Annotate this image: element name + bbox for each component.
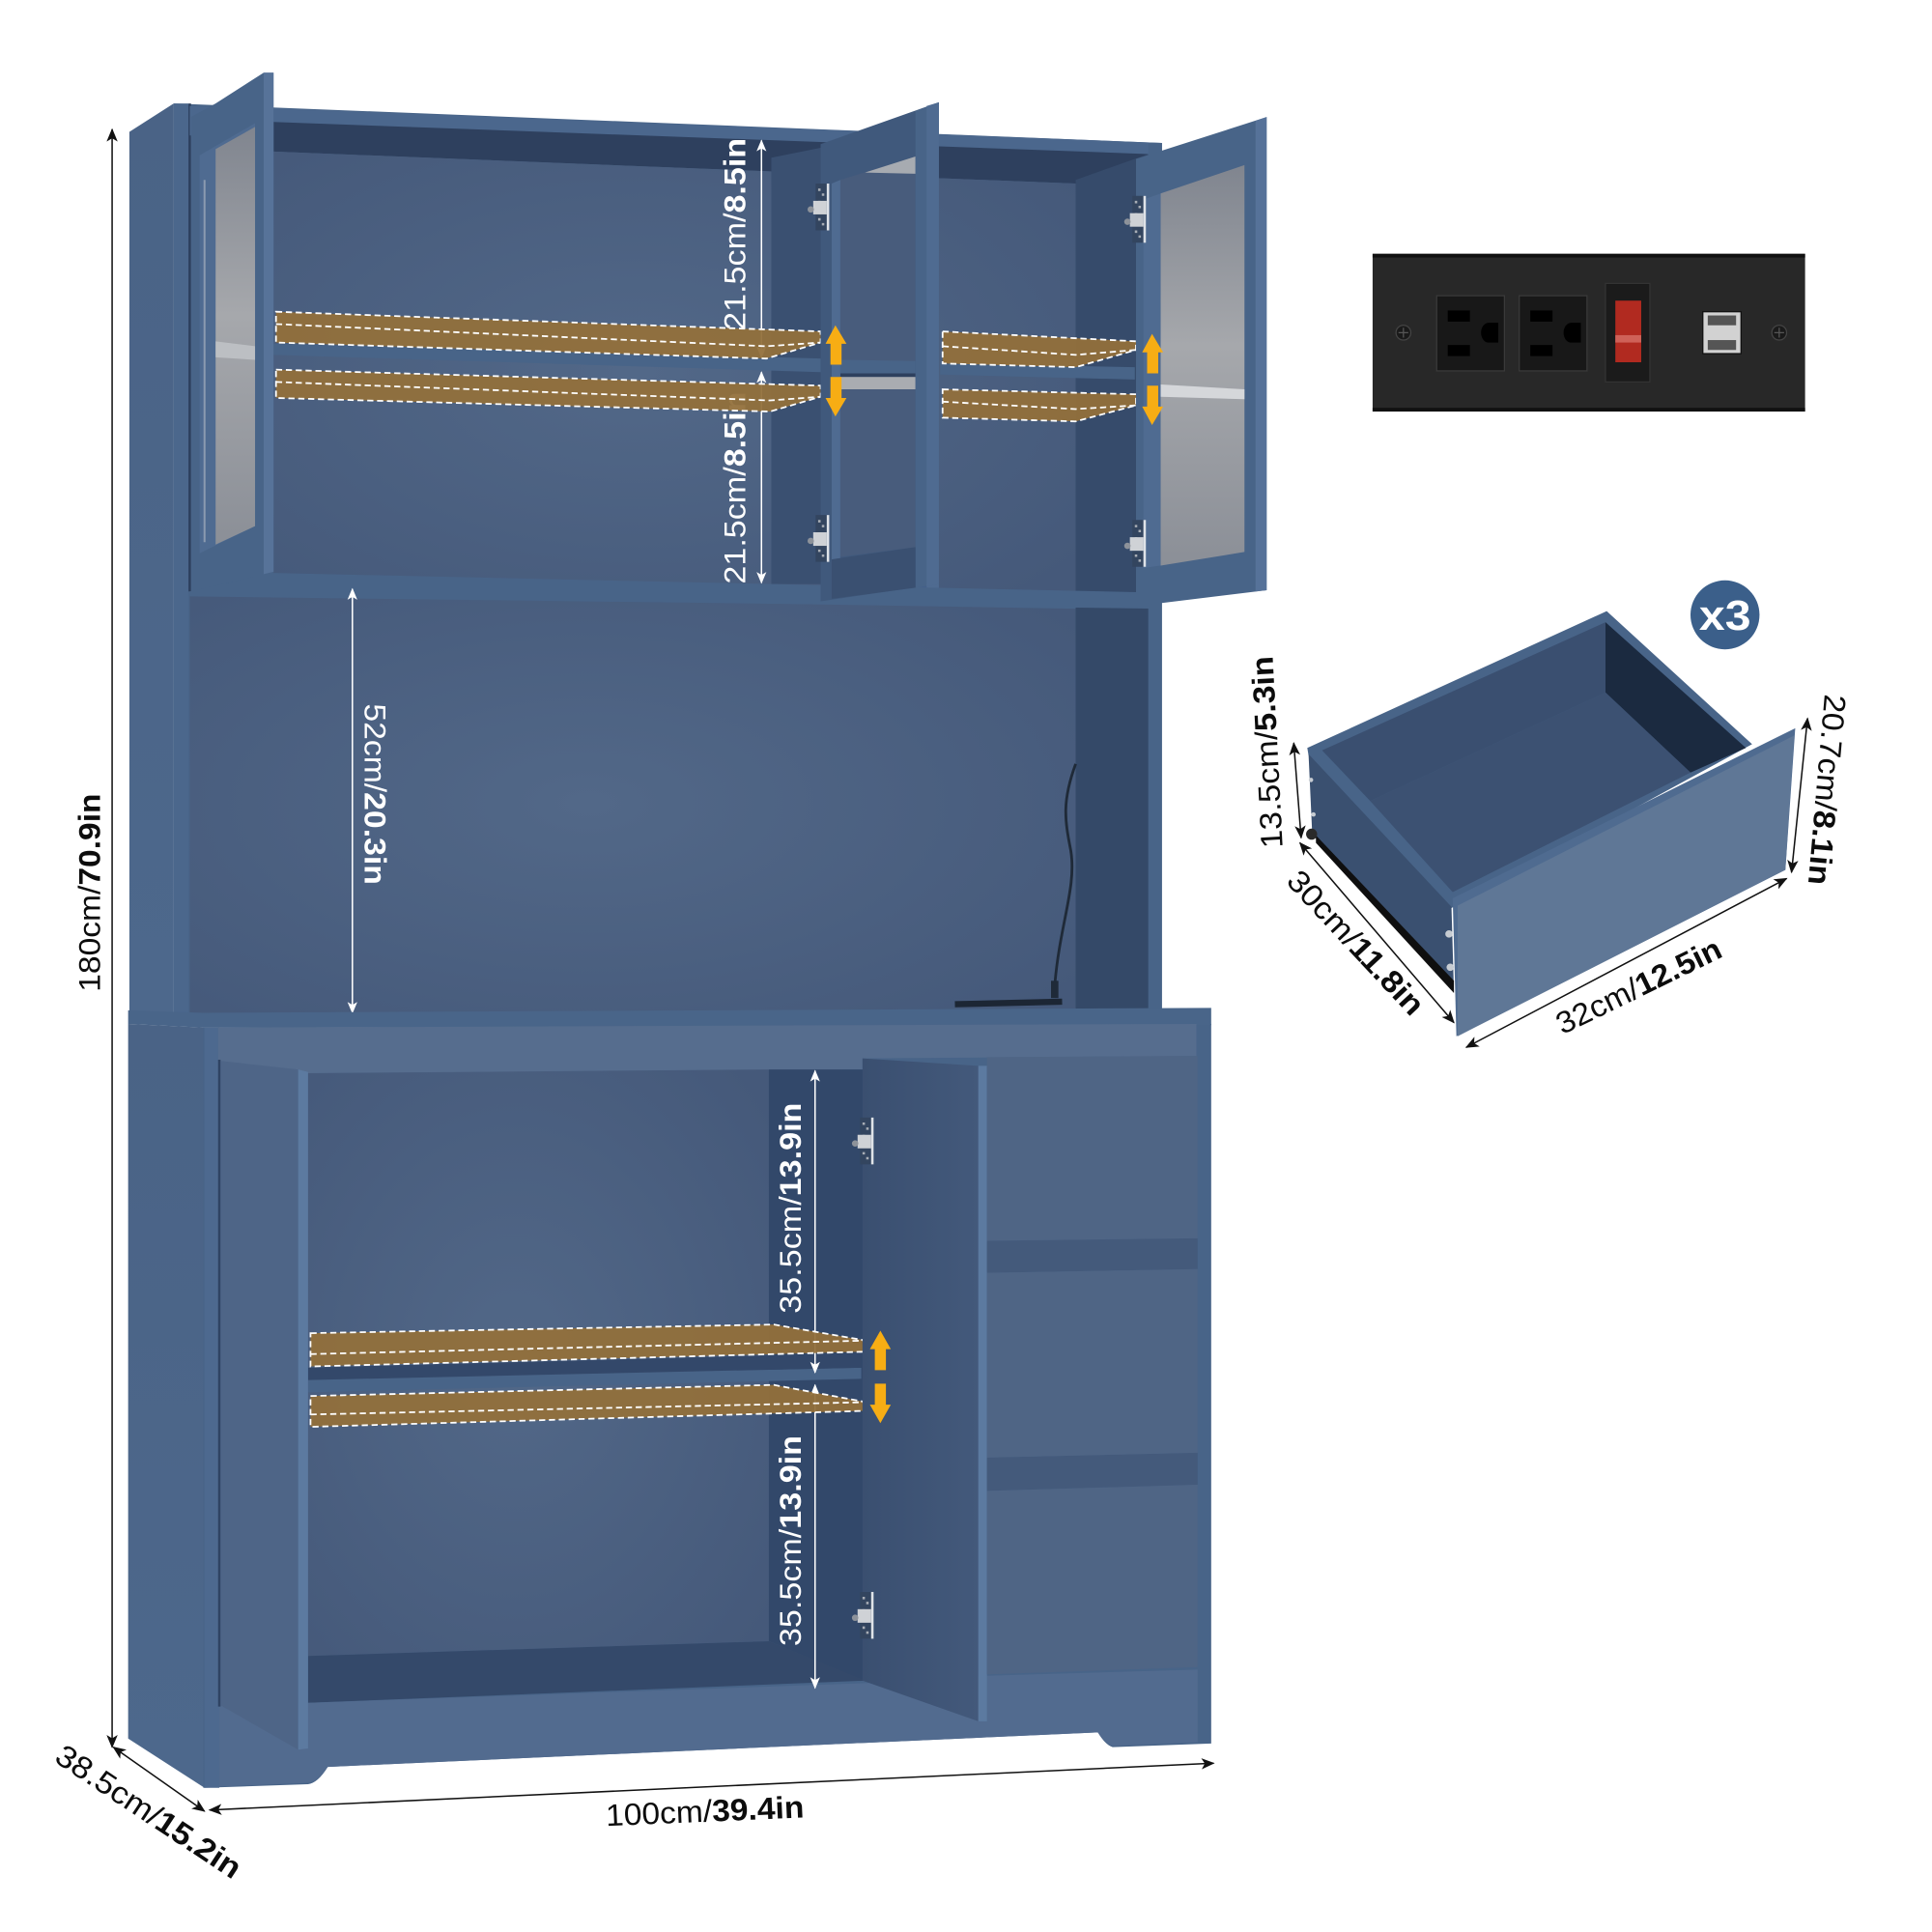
orange arrows upper [826, 326, 1163, 425]
three drawer fronts [987, 1056, 1198, 1674]
outlet right [1520, 296, 1587, 371]
power strip panel [1373, 254, 1805, 412]
usb ports [1703, 312, 1741, 354]
drawer right wall [1605, 622, 1746, 773]
hutch bottom shelf [189, 573, 1158, 609]
power cord [955, 764, 1076, 1005]
rocker switch [1605, 283, 1650, 382]
dimension: total height: 180cm/70.9in [71, 793, 106, 992]
dimension: hutch opening height: 52cm/ 20.3in [358, 703, 393, 885]
slide rail [1316, 836, 1454, 993]
hinges lower [852, 1118, 873, 1638]
adjustable shelves lower [310, 1324, 867, 1427]
drawer 1 [987, 1056, 1198, 1240]
left glass door [191, 72, 273, 591]
rebate [200, 124, 255, 554]
counter top [128, 1008, 1211, 1028]
door right edge [916, 102, 939, 587]
left lower door [218, 1060, 308, 1749]
drawer 2 [987, 1269, 1198, 1458]
left stile [205, 1028, 219, 1788]
hutch front stile [174, 103, 188, 1015]
hutch right inner wall upper [1076, 154, 1149, 596]
door inner stile [832, 180, 840, 559]
hutch lower back panel [189, 594, 1076, 1012]
dimension: upper shelf top height: 21.5cm/8.5in [718, 138, 753, 330]
hinges upper [808, 184, 1146, 567]
hutch right inner wall lower [1076, 607, 1149, 1012]
x3 badge [1690, 581, 1759, 649]
dimension: total width [210, 1763, 1213, 1833]
dimension: drawer inner height: 13.5cm/5.3in [1244, 655, 1290, 849]
dimension: lower shelf top height: 35.5cm/13.9in [773, 1103, 808, 1314]
hutch ceiling [273, 122, 1149, 184]
lower side panel [128, 1024, 205, 1788]
hutch right post [1149, 143, 1162, 1015]
right lower door [863, 1059, 987, 1721]
fixed shelf left [273, 344, 820, 372]
screw right [1772, 326, 1786, 340]
drawer illustration [1306, 611, 1795, 1037]
x3 badge: x3 [1699, 593, 1750, 639]
dimension: upper shelf bottom height: 21.5cm/8.5in [718, 392, 753, 584]
door edge [264, 72, 273, 574]
dimension: drawer width [1466, 878, 1786, 1047]
middle glass door [820, 102, 939, 601]
screw left [1396, 326, 1410, 340]
dimension: drawer front height: 20.7cm/ 8.1in [1802, 694, 1853, 887]
outlet left [1436, 296, 1504, 371]
fixed shelf right [940, 363, 1135, 380]
adjustable shelves upper left [276, 312, 820, 412]
glass pane [1161, 165, 1244, 565]
hutch upper back panel [273, 152, 1076, 591]
drawer rim [1307, 611, 1752, 908]
drawer back wall [1322, 622, 1605, 801]
upper hutch [129, 103, 1162, 1015]
right glass door [1136, 117, 1266, 607]
door interior view [840, 156, 916, 557]
dimension: lower shelf bottom height: 35.5cm/13.9in [773, 1435, 808, 1646]
hutch middle divider [916, 148, 939, 591]
lower front frame [203, 1024, 1211, 1788]
dimension: total depth: 38.5cm/15.2in [49, 1738, 248, 1886]
inner side wall [769, 1069, 865, 1681]
drawer left wall [1309, 754, 1454, 992]
bottom front rail [219, 1669, 1198, 1786]
dimension: drawer depth: 30cm/11.8in [1280, 863, 1432, 1022]
adjustable shelves upper right [943, 331, 1136, 421]
hutch top frame [189, 106, 1162, 166]
lower cabinet [128, 1008, 1211, 1788]
hutch outer side panel [129, 103, 174, 1015]
cabinet back panel [308, 1069, 769, 1656]
drawer floor [1370, 693, 1690, 892]
drawer rail backing [987, 1238, 1198, 1273]
hutch base silhouette [174, 103, 1162, 1015]
glass pane [215, 127, 255, 545]
orange arrows lower [870, 1331, 891, 1423]
cabinet floor [308, 1641, 867, 1703]
top rail [218, 1024, 1197, 1073]
drawer 3 [987, 1485, 1198, 1674]
dimension: total width: 100cm/39.4in [605, 1789, 805, 1833]
dimension: drawer width: 32cm/12.5in [1550, 931, 1727, 1041]
drawer front panel [1453, 728, 1795, 1037]
fixed shelf [308, 1368, 862, 1392]
